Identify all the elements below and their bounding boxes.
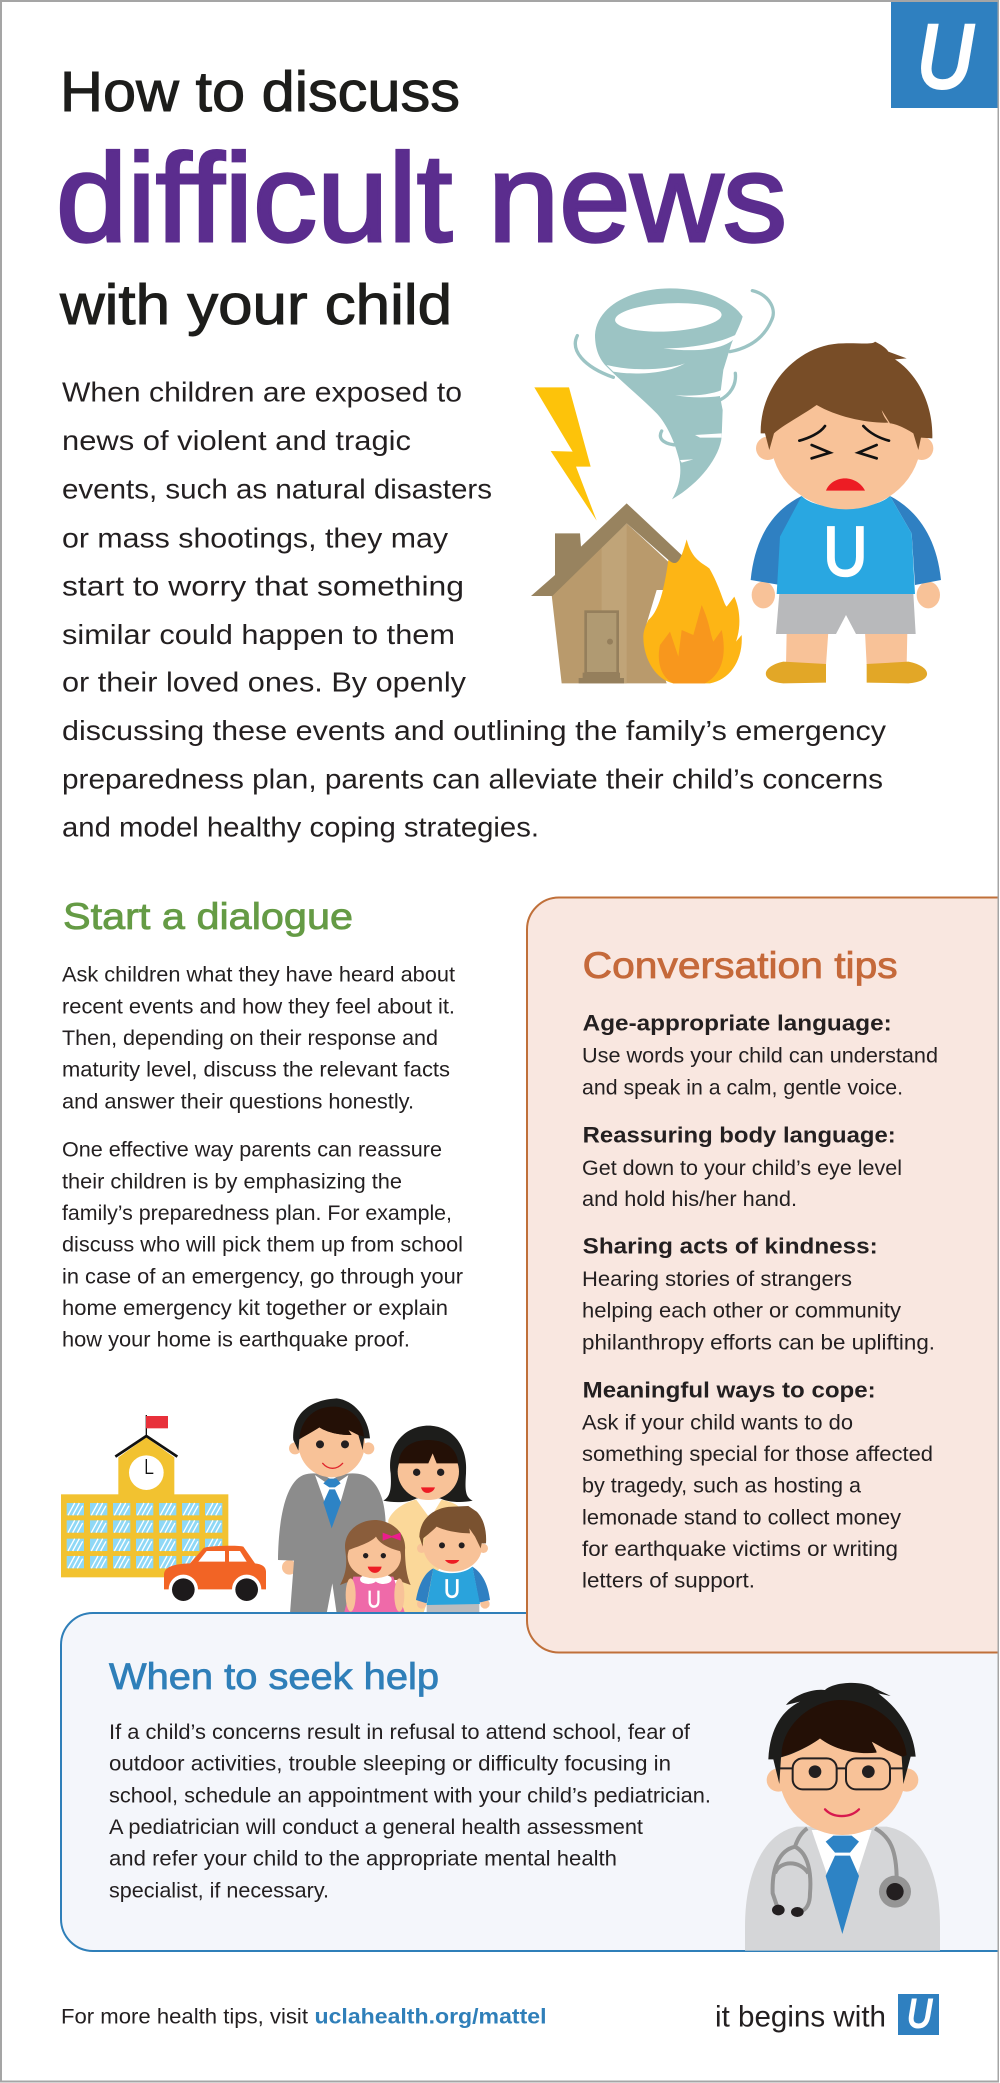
footer: website link: For more health tips, visit [61,2005,308,2028]
intro text: or mass shootings, they may [62,522,448,553]
tip: meaningful ways to cope: something special for those affected [582,1443,933,1466]
text block: second paragraph [62,1139,463,1352]
intro text: events, such as natural disasters [62,473,492,504]
tip: reassuring body language: Get down to your child’s eye level [582,1157,902,1180]
tip: meaningful ways to cope: Ask if your child wants to do [582,1411,853,1434]
footer: it begins with U logo [715,1992,939,2036]
text block: seek help body: specialist, if necessary. [109,1879,329,1902]
intro text: preparedness plan, parents can alleviate their child’s concerns [62,763,883,794]
text block: seek help body: outdoor activities, trouble sleeping or difficulty focusing in [109,1753,671,1776]
icon: tornado [575,288,773,499]
text block: first paragraph: and answer their questions honestly. [62,1090,414,1113]
title: How to discuss [60,60,460,124]
icon: school [61,1415,228,1577]
illustration: disasters and worried boy [531,288,941,683]
intro text: and model healthy coping strategies. [62,812,539,843]
text block: first paragraph: maturity level, discuss the relevant facts [62,1059,450,1082]
heading: conversation tips: Conversation tips [583,945,898,986]
tip: age-appropriate language [582,1011,938,1099]
icon: doctor [745,1683,940,1951]
text block: first paragraph: Then, depending on their response and [62,1027,438,1050]
text block: second paragraph: family’s preparedness plan. For example, [62,1202,452,1225]
tip: meaningful ways to cope [582,1377,933,1592]
tip: meaningful ways to cope: for earthquake victims or writing [582,1538,898,1561]
tip: reassuring body language [582,1122,902,1211]
illustration: school, car and family [61,1398,490,1614]
text block: second paragraph: home emergency kit together or explain [62,1297,448,1320]
icon: girl [340,1520,411,1614]
intro text: news of violent and tragic [62,425,411,456]
text block: seek help body [109,1721,711,1902]
icon: worried boy [751,342,941,683]
tip: reassuring body language: Reassuring body language: [583,1122,896,1147]
icon: fire [643,539,742,683]
tip: age-appropriate language: and speak in a calm, gentle voice. [582,1076,903,1099]
intro text [62,377,886,843]
intro text: start to worry that something [62,571,464,602]
tip: meaningful ways to cope: by tragedy, such as hosting a [582,1475,861,1498]
tip: sharing acts of kindness: Hearing stories of strangers [582,1268,852,1291]
footer: website link: uclahealth.org/mattel [314,2005,546,2028]
icon: mother [383,1426,473,1613]
tip: age-appropriate language: Age-appropriate language: [583,1011,892,1036]
text block: seek help body: A pediatrician will conduct a general health assessment [109,1816,643,1839]
logo: U badge: U [917,6,974,106]
tip: sharing acts of kindness [582,1233,935,1354]
tip: sharing acts of kindness: Sharing acts of kindness: [583,1233,878,1258]
panel: when to seek help [61,1613,1000,1951]
text block: seek help body: and refer your child to the appropriate mental health [109,1848,617,1871]
tip: sharing acts of kindness: philanthropy efforts can be uplifting. [582,1331,935,1354]
logo: U badge [891,0,1000,108]
panel: conversation tips [527,898,1000,1652]
text block: second paragraph: how your home is earthquake proof. [62,1329,410,1352]
text block: second paragraph: discuss who will pick them up from school [62,1234,463,1257]
title: difficult news [56,129,787,268]
icon: house [531,503,683,683]
intro text: When children are exposed to [62,377,462,408]
icon: boy: U [444,1573,460,1603]
text block: second paragraph: One effective way parents can reassure [62,1139,442,1162]
tip: sharing acts of kindness: helping each other or community [582,1300,902,1323]
section: start a dialogue [62,896,463,1352]
tip: meaningful ways to cope: letters of support. [582,1569,755,1592]
footer: website link [61,2005,546,2028]
text block: second paragraph: their children is by emphasizing the [62,1170,402,1193]
icon: boy [416,1506,490,1614]
icon: car [164,1546,266,1604]
tip: age-appropriate language: Use words your child can understand [582,1045,938,1068]
text block: seek help body: school, schedule an appointment with your child’s pediatrician. [109,1784,711,1807]
title [56,60,787,337]
tip: meaningful ways to cope: Meaningful ways to cope: [583,1377,876,1402]
icon: worried boy: U [823,512,867,590]
footer: it begins with U logo: U [907,1992,933,2036]
icon: girl: U [367,1587,381,1614]
heading: start a dialogue: Start a dialogue [63,896,353,937]
heading: when to seek help: When to seek help [109,1656,439,1697]
tip: meaningful ways to cope: lemonade stand to collect money [582,1506,902,1529]
tip: reassuring body language: and hold his/her hand. [582,1188,797,1211]
intro text: similar could happen to them [62,619,455,650]
title: with your child [59,273,452,337]
icon: lightning bolt [534,387,597,521]
text block: second paragraph: in case of an emergency, go through your [62,1265,463,1288]
text block: seek help body: If a child’s concerns result in refusal to attend school, fear of [109,1721,690,1744]
intro text: or their loved ones. By openly [62,667,466,698]
icon: father [278,1398,386,1613]
intro text: discussing these events and outlining the family’s emergency [62,715,886,746]
text block: first paragraph: Ask children what they have heard about [62,964,455,987]
text block: first paragraph: recent events and how they feel about it. [62,995,455,1018]
text block: first paragraph [62,964,455,1113]
footer: it begins with U logo: it begins with [715,2001,886,2034]
